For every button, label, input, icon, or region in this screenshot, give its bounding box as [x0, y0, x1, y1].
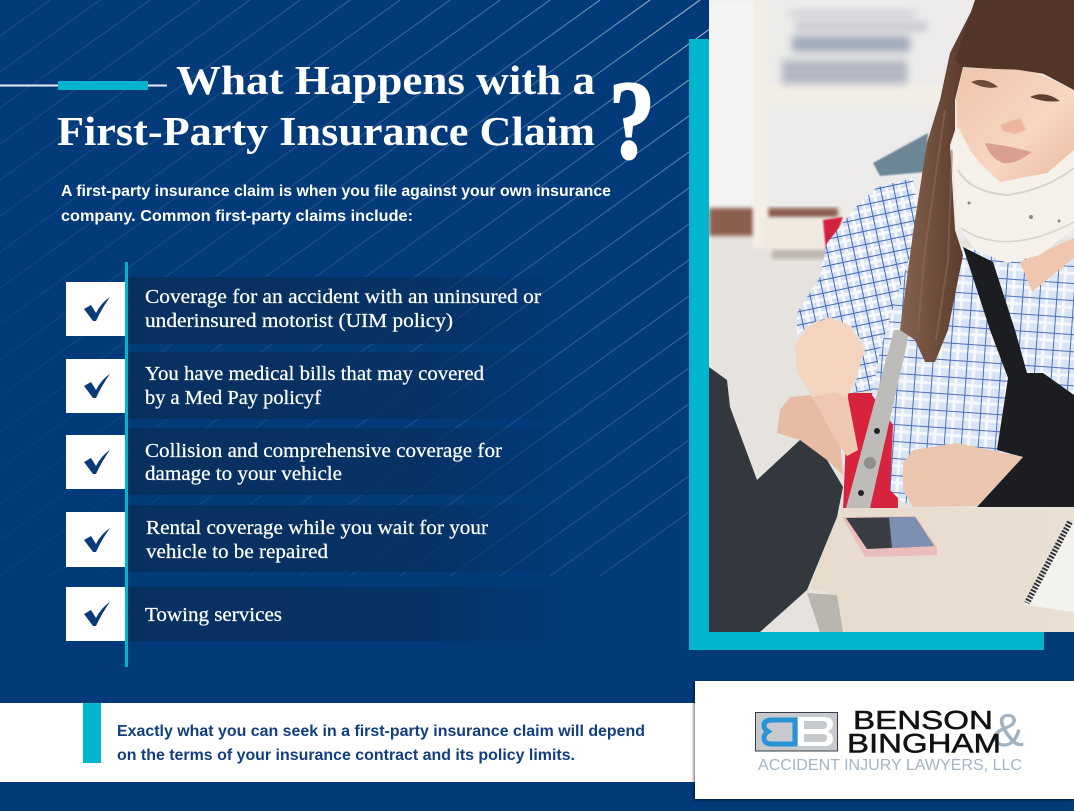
intro text	[61, 183, 611, 225]
row 3: Collision and comprehensive coverage for	[145, 440, 502, 462]
table	[810, 508, 1074, 632]
row 3	[66, 428, 572, 495]
question mark: ?	[609, 59, 655, 183]
chair	[873, 133, 928, 176]
bottom note: on the terms of your insurance contract and its policy limits.	[117, 747, 575, 764]
clip on floor	[807, 593, 843, 632]
neck	[1020, 238, 1074, 292]
bangs	[955, 0, 1074, 90]
woman's arm	[795, 317, 865, 397]
crutch	[846, 330, 910, 508]
row 4	[66, 505, 572, 572]
checklist	[66, 277, 572, 641]
photo: woman in neck brace shaking hands	[709, 0, 1074, 638]
row 4: Rental coverage while you wait for your	[146, 517, 488, 539]
phone	[842, 516, 937, 557]
hair	[900, 0, 1074, 362]
logo tagline: ACCIDENT INJURY LAWYERS, LLC	[758, 757, 1022, 774]
woman's hand	[903, 443, 1023, 507]
face	[956, 68, 1074, 182]
shirt	[797, 178, 1074, 505]
neck brace	[952, 127, 1074, 263]
row 1: Coverage for an accident with an uninsured or	[145, 286, 541, 308]
intro text: company. Common first-party claims include:	[61, 208, 413, 225]
intro text: A first-party insurance claim is when you file against your own insurance	[61, 183, 611, 200]
row 1	[66, 277, 572, 344]
row 2	[66, 352, 572, 419]
title	[57, 57, 595, 154]
row 5	[66, 587, 572, 641]
blurred room background	[709, 0, 1074, 638]
row 5: Towing services	[145, 604, 282, 626]
teal photo frame	[689, 39, 1044, 650]
title accent line	[0, 81, 167, 90]
logo panel	[695, 681, 1074, 799]
teal vertical rule	[125, 262, 128, 667]
sling and bag	[963, 247, 1074, 507]
title: First-Party Insurance Claim	[57, 108, 595, 154]
row 3: damage to your vehicle	[145, 463, 342, 485]
dark jacket	[709, 367, 843, 632]
logo mark	[756, 712, 838, 751]
other person's hand	[777, 395, 843, 475]
row 2: by a Med Pay policyf	[145, 387, 321, 409]
clasped fingers	[813, 392, 858, 456]
bottom note: Exactly what you can seek in a first-party insurance claim will depend	[117, 723, 645, 740]
title: What Happens with a	[176, 57, 595, 103]
diagonal stripe pattern	[0, 0, 709, 576]
notebook	[1025, 522, 1074, 612]
row 4: vehicle to be repaired	[146, 541, 328, 563]
row 1: underinsured motorist (UIM policy)	[145, 310, 453, 332]
bottom note	[0, 703, 695, 782]
logo name	[847, 705, 1001, 758]
logo name: BENSON	[853, 705, 993, 735]
logo name: BINGHAM	[847, 728, 1001, 758]
logo ampersand: &	[992, 704, 1024, 756]
row 2: You have medical bills that may covered	[145, 363, 484, 385]
